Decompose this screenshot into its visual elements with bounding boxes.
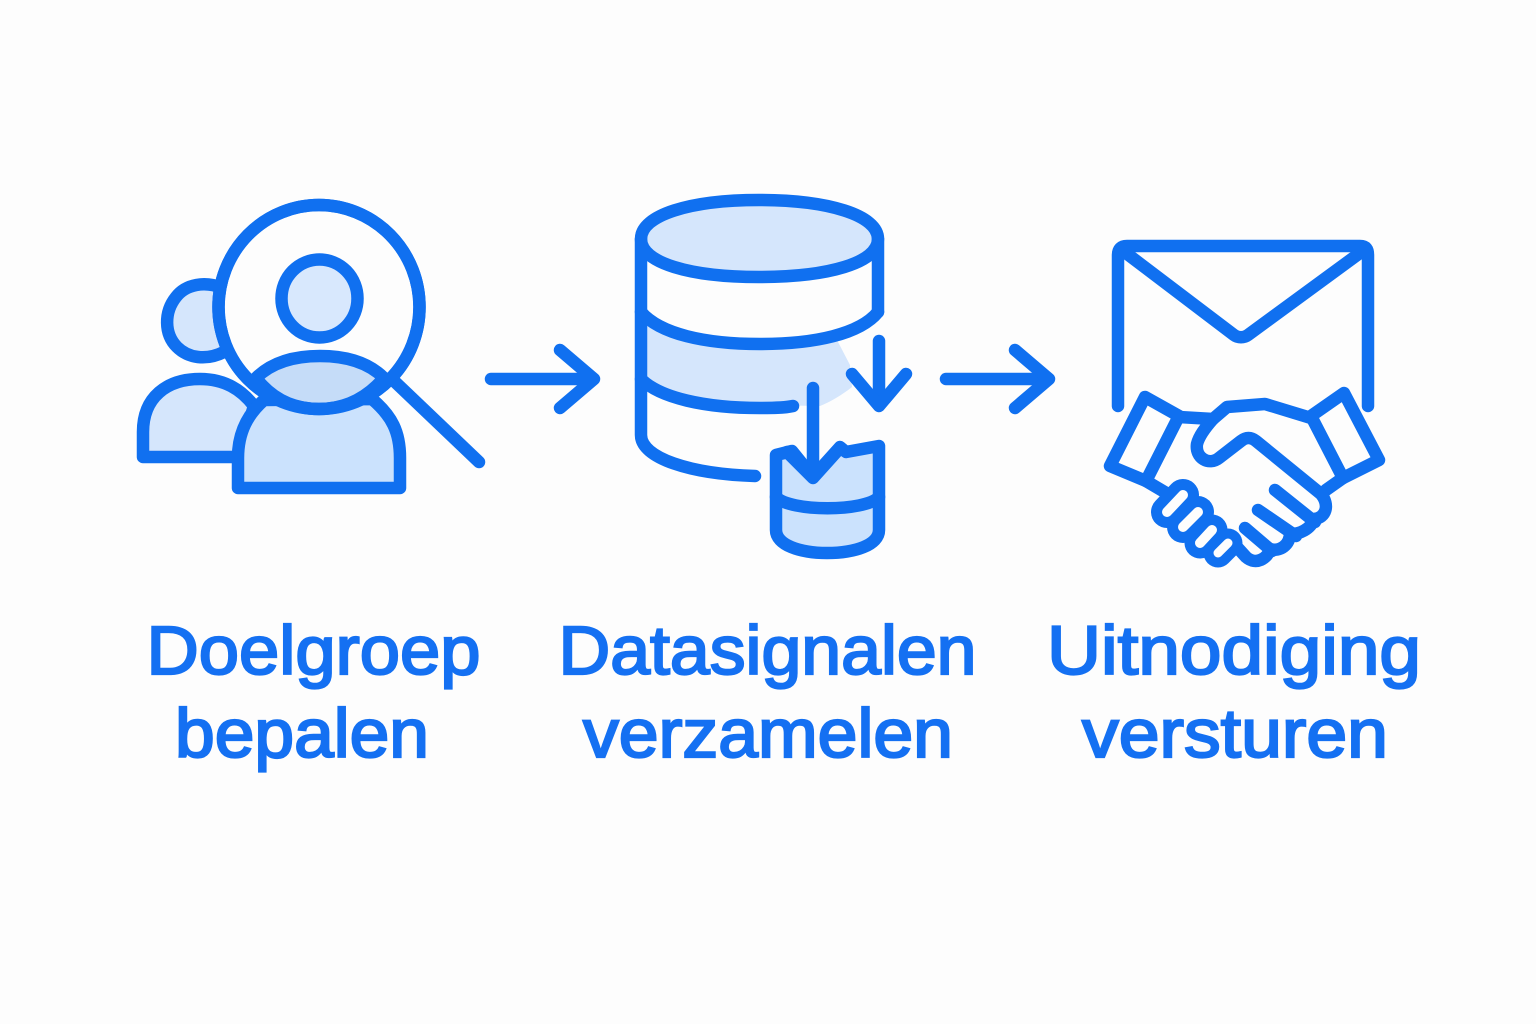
heading: step three [1047, 612, 1421, 772]
heading: step three: versturen [1082, 695, 1388, 772]
icon: database with download arrows [641, 200, 906, 553]
icon: envelope with handshake [1110, 246, 1379, 561]
sub-icon: fingers of left hand [1167, 495, 1228, 553]
heading: step two: verzamelen [583, 695, 953, 772]
heading: step one [146, 612, 480, 772]
icon: people with magnifying glass [143, 205, 479, 488]
arrow: step one to step two [491, 350, 594, 408]
heading: step two: Datasignalen [558, 612, 976, 689]
heading: step two [558, 612, 976, 772]
heading: step three: Uitnodiging [1047, 612, 1421, 689]
heading: step one: bepalen [175, 695, 429, 772]
arrow: step two to step three [946, 350, 1049, 408]
heading: step one: Doelgroep [146, 612, 480, 689]
